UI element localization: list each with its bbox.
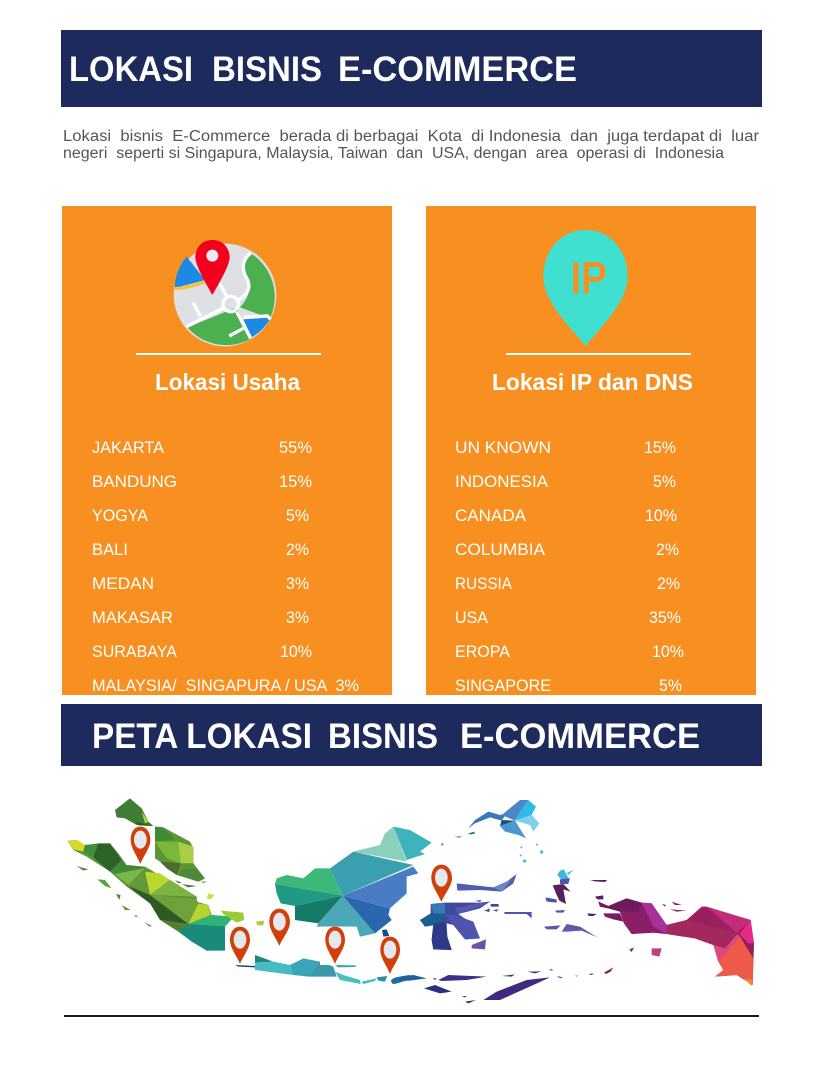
table: lokasi ip dan dns: 5% (653, 473, 676, 491)
map banner: BISNIS (328, 717, 438, 756)
table: lokasi usaha: MALAYSIA/ SINGAPURA / USA 3% (92, 677, 359, 695)
table: lokasi ip dan dns: 15% (644, 439, 676, 457)
intro text (63, 128, 759, 162)
map banner: PETA LOKASI (92, 717, 312, 756)
panel: lokasi ip dan dns (426, 206, 756, 695)
pin 3 (269, 909, 290, 946)
table: lokasi ip dan dns: 10% (645, 507, 677, 525)
pin 5 (380, 937, 400, 974)
table: lokasi usaha: BANDUNG (92, 473, 177, 491)
map banner: E-COMMERCE (460, 717, 700, 756)
table: lokasi usaha: YOGYA (92, 507, 148, 525)
table: lokasi ip dan dns: CANADA (455, 507, 526, 525)
java and lesser sunda (235, 955, 410, 984)
table: lokasi usaha: MEDAN (92, 575, 154, 593)
panel: lokasi usaha (62, 206, 392, 695)
table: lokasi ip dan dns: 2% (657, 575, 680, 593)
table: lokasi usaha: 55% (279, 439, 312, 457)
table: lokasi ip dan dns (455, 439, 684, 695)
table: lokasi ip dan dns: INDONESIA (455, 473, 548, 491)
icon: ip pin (543, 230, 628, 346)
table: lokasi ip dan dns: 2% (656, 541, 679, 559)
kalimantan (275, 827, 432, 937)
table: lokasi ip dan dns: USA (455, 609, 488, 627)
map of indonesia (67, 798, 754, 1003)
table: lokasi usaha: 2% (286, 541, 309, 559)
table: lokasi usaha: 3% (286, 575, 309, 593)
pin 4 (325, 927, 345, 964)
title banner: LOKASI (69, 50, 193, 89)
table: lokasi usaha: 10% (280, 643, 312, 661)
table: lokasi ip dan dns: RUSSIA (455, 575, 512, 593)
table: lokasi usaha: JAKARTA (92, 439, 164, 457)
table: lokasi ip dan dns: UN KNOWN (455, 439, 551, 457)
title banner: E-COMMERCE (338, 50, 577, 89)
table: lokasi usaha: SURABAYA (92, 643, 177, 661)
title banner (61, 30, 762, 107)
heading: lokasi usaha: Lokasi Usaha (155, 369, 301, 395)
table: lokasi ip dan dns: 10% (652, 643, 684, 661)
table: lokasi ip dan dns: SINGAPORE (455, 677, 551, 695)
icon: map with pin (174, 240, 276, 346)
table: lokasi usaha: 5% (286, 507, 309, 525)
intro text: Lokasi bisnis E-Commerce berada di berbagai Kota di Indonesia dan juga terdapat di luar (63, 128, 759, 145)
pin 2 (230, 927, 250, 964)
table: lokasi ip dan dns: EROPA (455, 643, 510, 661)
malay peninsula (115, 798, 207, 887)
table: lokasi usaha: MAKASAR (92, 609, 173, 627)
location pins (126, 826, 452, 974)
table: lokasi ip dan dns: COLUMBIA (455, 541, 545, 559)
heading: lokasi ip dan dns: Lokasi IP dan DNS (492, 369, 693, 395)
table: lokasi usaha (92, 439, 359, 695)
title banner: BISNIS (212, 50, 322, 89)
intro text: negeri seperti si Singapura, Malaysia, Taiwan dan USA, dengan area operasi di Indonesia (63, 145, 724, 162)
table: lokasi usaha: 3% (286, 609, 309, 627)
sumatra (67, 840, 264, 951)
table: lokasi usaha: 15% (279, 473, 312, 491)
map banner (61, 704, 762, 766)
table: lokasi ip dan dns: 35% (649, 609, 681, 627)
eastern islands (400, 800, 754, 1003)
pin 6 (431, 865, 452, 902)
icon: ip pin: IP (571, 255, 607, 303)
table: lokasi usaha: BALI (92, 541, 128, 559)
pin 1 (131, 827, 150, 864)
table: lokasi ip dan dns: 5% (659, 677, 682, 695)
